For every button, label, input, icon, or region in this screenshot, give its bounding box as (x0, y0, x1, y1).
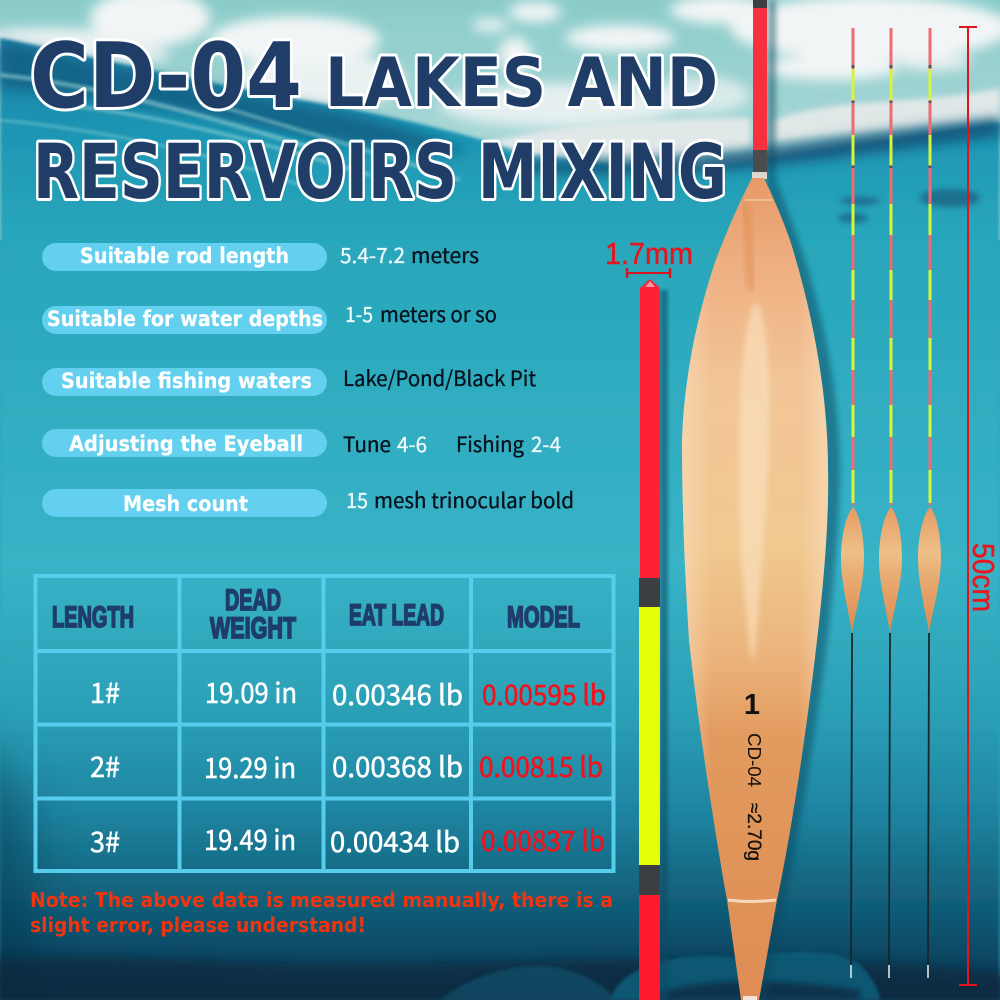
table row 1 (90, 672, 606, 714)
spec row: mesh count: mesh trinocular bold (374, 485, 574, 515)
table header: DEAD (225, 584, 281, 617)
spec row: rod length (42, 240, 479, 271)
spec row: water depths: meters or so (380, 299, 497, 329)
table row 3: 0.00837 lb (481, 820, 605, 860)
spec row: fishing waters: Lake/Pond/Black Pit (343, 363, 536, 393)
table header: EAT LEAD (349, 599, 444, 632)
thick rod close-up (639, 279, 668, 1000)
spec row: eyeball: Adjusting the Eyeball (69, 432, 303, 456)
spec row: water depths: 1-5 (345, 299, 373, 329)
table row 2 (90, 746, 603, 787)
float markings (743, 689, 764, 861)
small float 2 (879, 28, 902, 978)
table header: WEIGHT (210, 612, 296, 645)
float markings: ≈2.70g (743, 803, 764, 861)
table row 2: 19.29 in (204, 747, 296, 787)
float body (682, 178, 828, 1000)
table row 1: 19.09 in (205, 672, 297, 712)
spec row: rod length: Suitable rod length (80, 244, 289, 268)
table row 1: 0.00346 lb (332, 674, 463, 714)
large float close-up (682, 0, 840, 1000)
spec row: rod length: 5.4-7.2 (340, 240, 405, 270)
table row 1: 1# (90, 672, 120, 712)
spec row: eyeball (42, 429, 561, 459)
table row 3: 3# (90, 821, 120, 861)
spec row: fishing waters (42, 363, 536, 396)
table row 3 (90, 819, 605, 861)
float shadow (758, 0, 840, 1000)
small float 3 (918, 28, 941, 978)
note: slight error, please understand! (30, 913, 366, 937)
small float 1 (841, 28, 864, 978)
table row 2: 2# (90, 746, 120, 786)
spec row: mesh count: 15 (346, 485, 368, 515)
spec row: mesh count: Mesh count (123, 492, 248, 516)
table row 3: 19.49 in (204, 819, 296, 859)
title: RESERVOIRS MIXING (33, 127, 727, 216)
spec row: fishing waters: Suitable fishing waters (61, 369, 312, 393)
table header: LENGTH (52, 601, 134, 634)
spec row: eyeball: Fishing (456, 429, 524, 459)
spec row: water depths (42, 299, 497, 334)
table row 2: 0.00815 lb (479, 746, 603, 786)
table row 2: 0.00368 lb (332, 746, 463, 786)
length ruler: 50cm (959, 27, 1000, 985)
note: Note: The above data is measured manually, there is a (30, 888, 613, 912)
float markings: CD-04 (744, 733, 764, 787)
spec row: rod length: meters (411, 240, 479, 270)
title: LAKES AND (325, 44, 718, 123)
spec row: water depths: Suitable for water depths (47, 307, 323, 331)
table row 1: 0.00595 lb (482, 674, 606, 714)
note (30, 888, 613, 937)
specification table (36, 576, 614, 871)
spec row: eyeball: 2-4 (531, 429, 561, 459)
diameter callout: 1.7mm: 1.7mm (605, 236, 693, 271)
upper antenna (752, 0, 767, 179)
title (30, 24, 727, 216)
spec row: eyeball: Tune (343, 429, 391, 459)
title: CD-04 (30, 24, 302, 129)
length ruler: 50cm: 50cm (966, 543, 1000, 612)
float markings: 1 (744, 689, 760, 721)
spec row: eyeball: 4-6 (397, 429, 427, 459)
table header (52, 584, 580, 645)
table row 3: 0.00434 lb (330, 821, 460, 861)
table header: MODEL (507, 601, 580, 634)
spec row: mesh count (42, 485, 574, 517)
